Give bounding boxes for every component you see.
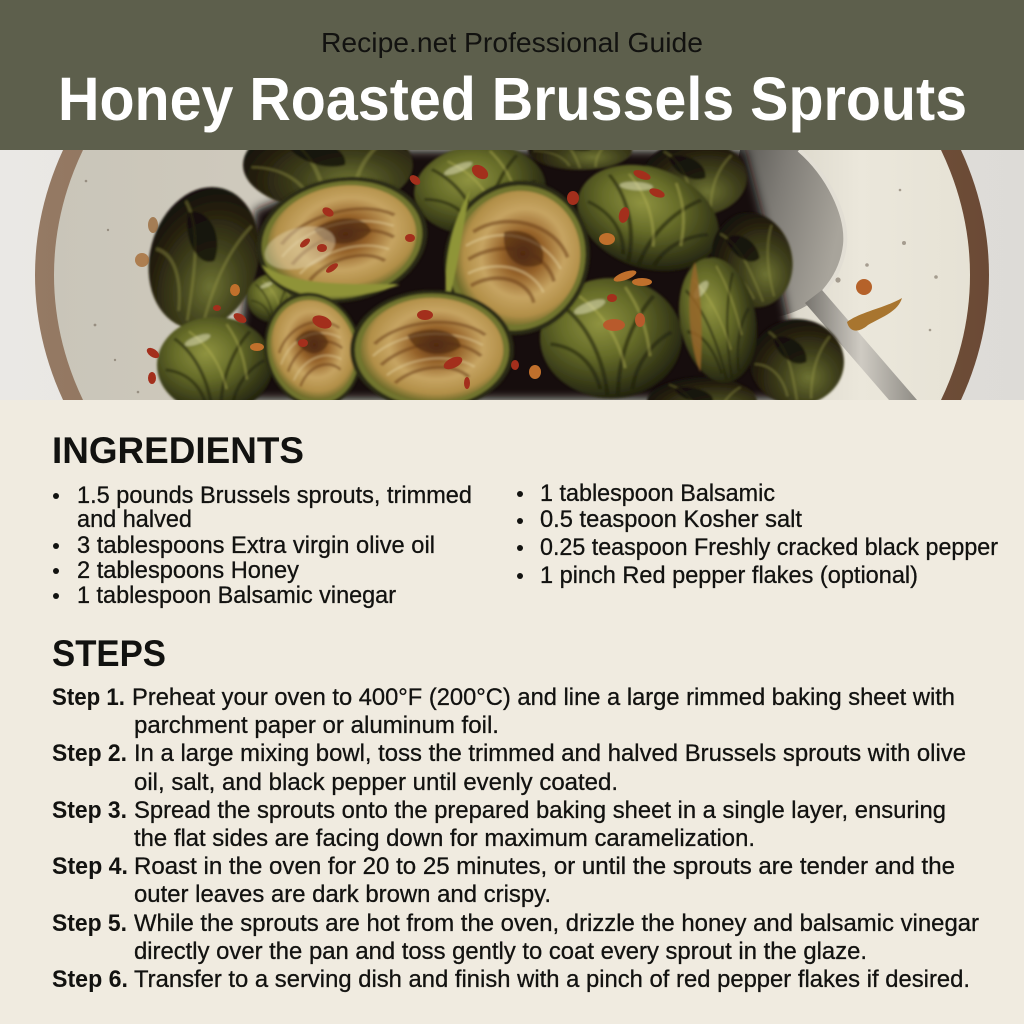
ingredients list: left column: 2 tablespoons Honey bbox=[77, 557, 300, 584]
step 3 bbox=[52, 797, 946, 852]
ingredients list: right column: 1 tablespoon Balsamic bbox=[540, 480, 775, 507]
ingredients list: left column: and halved bbox=[77, 506, 192, 533]
subtitle: Recipe.net Professional Guide bbox=[321, 27, 703, 58]
ingredients list: right column: 0.25 teaspoon Freshly cracked black pepper bbox=[540, 534, 998, 561]
step 1: parchment paper or aluminum foil. bbox=[134, 712, 499, 739]
step 5: directly over the pan and toss gently to coat every sprout in the glaze. bbox=[134, 938, 867, 965]
step 6: Transfer to a serving dish and finish with a pinch of red pepper flakes if desired. bbox=[134, 966, 970, 993]
whole sprouts bbox=[147, 150, 846, 400]
ingredients list: left column: 1 tablespoon Balsamic vinegar bbox=[77, 582, 396, 609]
step 2: In a large mixing bowl, toss the trimmed and halved Brussels sprouts with olive bbox=[134, 740, 966, 767]
title: Honey Roasted Brussels Sprouts bbox=[58, 65, 967, 133]
step 6: Step 6. bbox=[52, 966, 128, 993]
red pepper flakes bbox=[135, 162, 872, 389]
step 3: Step 3. bbox=[52, 797, 127, 824]
step 3: Spread the sprouts onto the prepared baking sheet in a single layer, ensuring bbox=[134, 797, 946, 824]
step 2: oil, salt, and black pepper until evenly coated. bbox=[134, 769, 618, 796]
ingredients list: right column: 0.5 teaspoon Kosher salt bbox=[540, 506, 802, 533]
step 1: Preheat your oven to 400°F (200°C) and line a large rimmed baking sheet with bbox=[132, 684, 955, 711]
step 4: outer leaves are dark brown and crispy. bbox=[134, 881, 551, 908]
honey drizzle bbox=[847, 298, 902, 331]
ingredients list: right column: 1 pinch Red pepper flakes (optional) bbox=[540, 562, 918, 589]
photo: roasted Brussels sprouts in a bowl bbox=[35, 150, 1024, 400]
step 5: While the sprouts are hot from the oven, drizzle the honey and balsamic vinegar bbox=[134, 910, 979, 937]
step 5: Step 5. bbox=[52, 910, 127, 937]
cut sprouts bbox=[258, 176, 590, 400]
ingredients list: left column bbox=[53, 482, 472, 609]
step 1: Step 1. bbox=[52, 684, 125, 711]
step 4: Step 4. bbox=[52, 853, 128, 880]
dark gaps between sprouts bbox=[190, 150, 805, 400]
ingredients list: left column: 3 tablespoons Extra virgin olive oil bbox=[77, 532, 435, 559]
steps heading: STEPS bbox=[52, 633, 166, 674]
step 2 bbox=[52, 740, 966, 796]
step 5 bbox=[52, 910, 979, 965]
step 4: Roast in the oven for 20 to 25 minutes, or until the sprouts are tender and the bbox=[134, 853, 955, 880]
steps list bbox=[52, 684, 979, 993]
step 1 bbox=[52, 684, 955, 739]
bowl bbox=[35, 150, 989, 400]
spoon bbox=[720, 150, 917, 400]
header banner bbox=[0, 0, 1024, 150]
ingredients heading: INGREDIENTS bbox=[52, 430, 304, 471]
step 4 bbox=[52, 853, 955, 908]
ingredients list: right column bbox=[517, 480, 998, 589]
step 3: the flat sides are facing down for maximum caramelization. bbox=[134, 825, 755, 852]
ingredients list: left column: 1.5 pounds Brussels sprouts, trimmed bbox=[77, 482, 472, 509]
step 2: Step 2. bbox=[52, 740, 127, 767]
